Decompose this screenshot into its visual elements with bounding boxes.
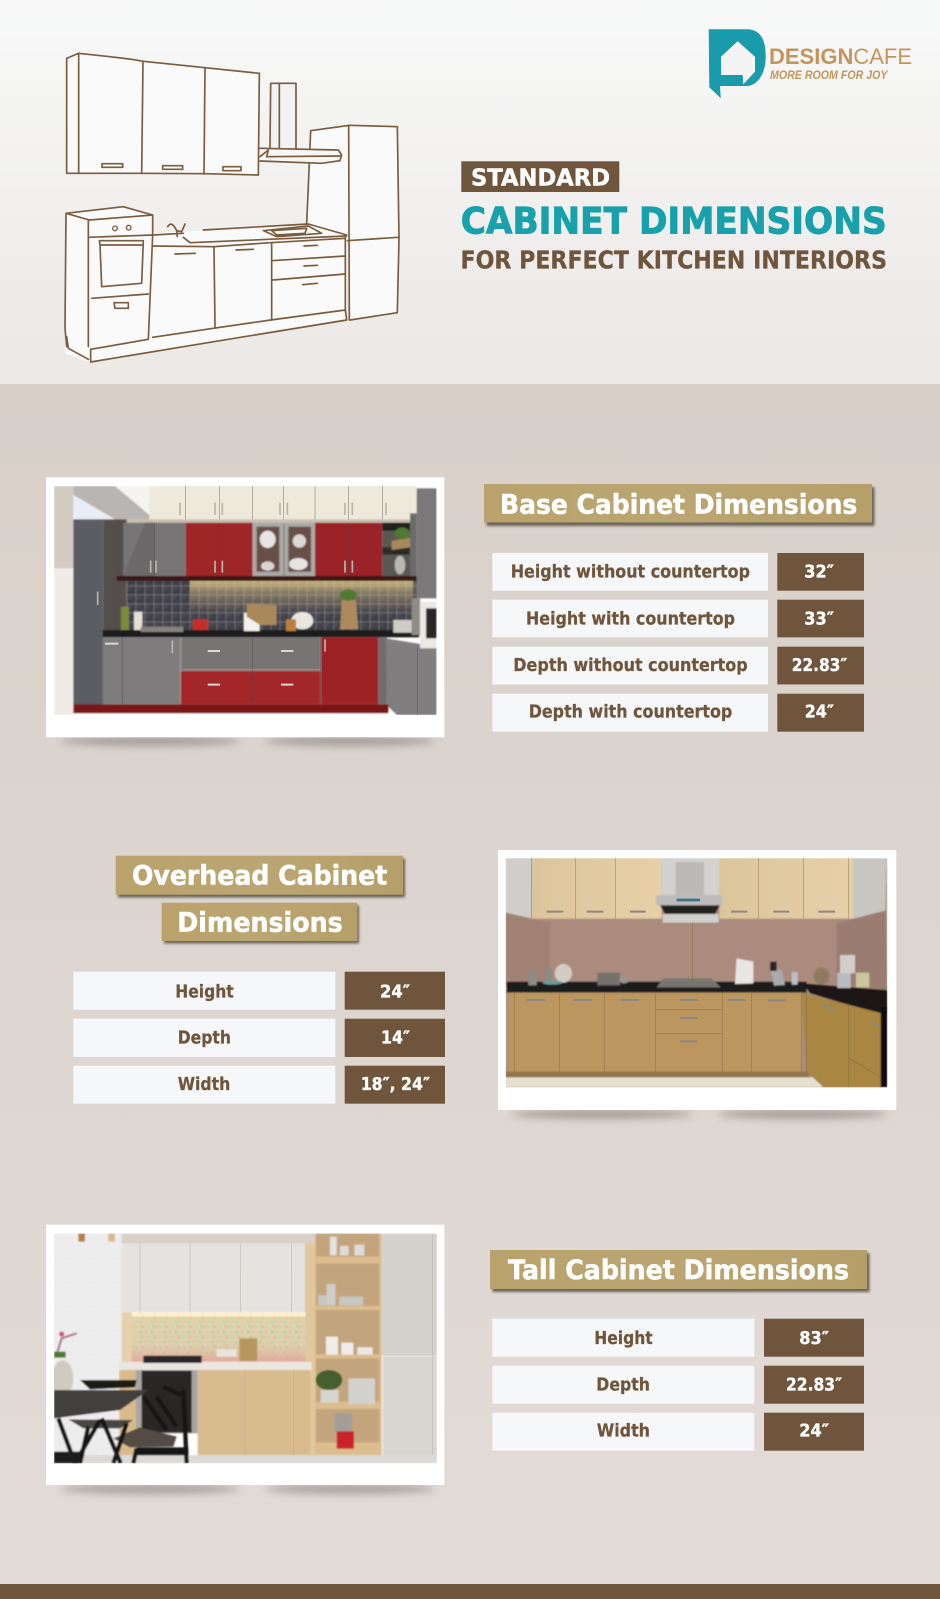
photo 1: red and grey kitchen bbox=[46, 477, 444, 746]
row: depth: 14″ bbox=[381, 1028, 410, 1049]
row: height: 24″ bbox=[380, 981, 410, 1002]
row: depth bbox=[492, 1366, 864, 1404]
heading: tall cabinet: Tall Cabinet Dimensions bbox=[508, 1255, 849, 1286]
row: height: Height bbox=[175, 981, 234, 1002]
row: depth: Depth bbox=[178, 1028, 231, 1049]
row: depth without countertop bbox=[492, 647, 864, 684]
logo mark bbox=[709, 29, 766, 98]
logo wordmark: DESIGNCAFE bbox=[769, 44, 912, 69]
row: height bbox=[492, 1319, 864, 1357]
row: depth with countertop: Depth with countertop bbox=[529, 702, 732, 723]
title: cabinet dimensions: CABINET DIMENSIONS bbox=[461, 199, 887, 242]
row: depth bbox=[73, 1019, 445, 1057]
photo 3: light wood kitchen bbox=[46, 1225, 444, 1494]
row: depth with countertop: 24″ bbox=[805, 702, 834, 723]
upper cabinets bbox=[67, 53, 259, 175]
illustration: kitchen line drawing bbox=[65, 53, 399, 363]
heading: base cabinet bbox=[484, 484, 874, 526]
row: height with countertop: 33″ bbox=[804, 608, 834, 629]
heading: base cabinet: Base Cabinet Dimensions bbox=[500, 489, 857, 520]
shelf items bbox=[330, 1237, 337, 1255]
row: depth without countertop: Depth without countertop bbox=[513, 655, 748, 676]
row: height without countertop: Height without countertop bbox=[511, 562, 750, 583]
dining table and chairs bbox=[54, 1360, 74, 1391]
row: width: 18″, 24″ bbox=[361, 1074, 430, 1095]
row: depth with countertop bbox=[492, 694, 864, 732]
row: height: Height bbox=[594, 1328, 653, 1349]
heading: tall cabinet bbox=[490, 1250, 870, 1292]
row: width: Width bbox=[597, 1421, 650, 1442]
row: width: 24″ bbox=[799, 1421, 829, 1442]
base cabinets and oven bbox=[65, 207, 347, 363]
row: height with countertop bbox=[492, 600, 864, 637]
counter items bbox=[121, 607, 129, 630]
row: depth: Depth bbox=[596, 1374, 650, 1395]
chimney hood bbox=[260, 83, 342, 163]
title bbox=[460, 161, 887, 275]
row: depth without countertop: 22.83″ bbox=[792, 655, 847, 676]
row: height with countertop: Height with countertop bbox=[526, 608, 735, 629]
row: width bbox=[492, 1413, 864, 1451]
counter items bbox=[555, 964, 572, 983]
main background bbox=[0, 384, 940, 1584]
footer bar bbox=[0, 1584, 940, 1599]
row: width: Width bbox=[178, 1074, 230, 1095]
row: height without countertop: 32″ bbox=[804, 562, 834, 583]
row: height bbox=[73, 972, 445, 1010]
row: width bbox=[73, 1066, 445, 1104]
photo shadow bbox=[60, 736, 435, 746]
heading: overhead cabinet: Dimensions bbox=[177, 908, 343, 939]
refrigerator bbox=[307, 125, 399, 320]
row: height: 83″ bbox=[799, 1328, 829, 1349]
photo 2: beige kitchen bbox=[498, 850, 896, 1119]
table: base cabinet dimensions bbox=[484, 484, 874, 732]
title tag: standard: STANDARD bbox=[471, 163, 610, 191]
subtitle: FOR PERFECT KITCHEN INTERIORS bbox=[460, 246, 887, 275]
heading: overhead cabinet bbox=[116, 856, 405, 944]
row: height without countertop bbox=[492, 553, 864, 591]
photo shadow bbox=[512, 1109, 887, 1119]
logo: DesignCafe bbox=[709, 29, 912, 98]
row: depth: 22.83″ bbox=[786, 1374, 842, 1395]
table: overhead cabinet dimensions bbox=[73, 856, 445, 1104]
logo tagline: MORE ROOM FOR JOY bbox=[770, 70, 889, 82]
photo shadow bbox=[60, 1484, 435, 1494]
header panel bbox=[0, 0, 940, 384]
table: tall cabinet dimensions bbox=[490, 1250, 870, 1451]
heading: overhead cabinet: Overhead Cabinet bbox=[132, 861, 387, 892]
